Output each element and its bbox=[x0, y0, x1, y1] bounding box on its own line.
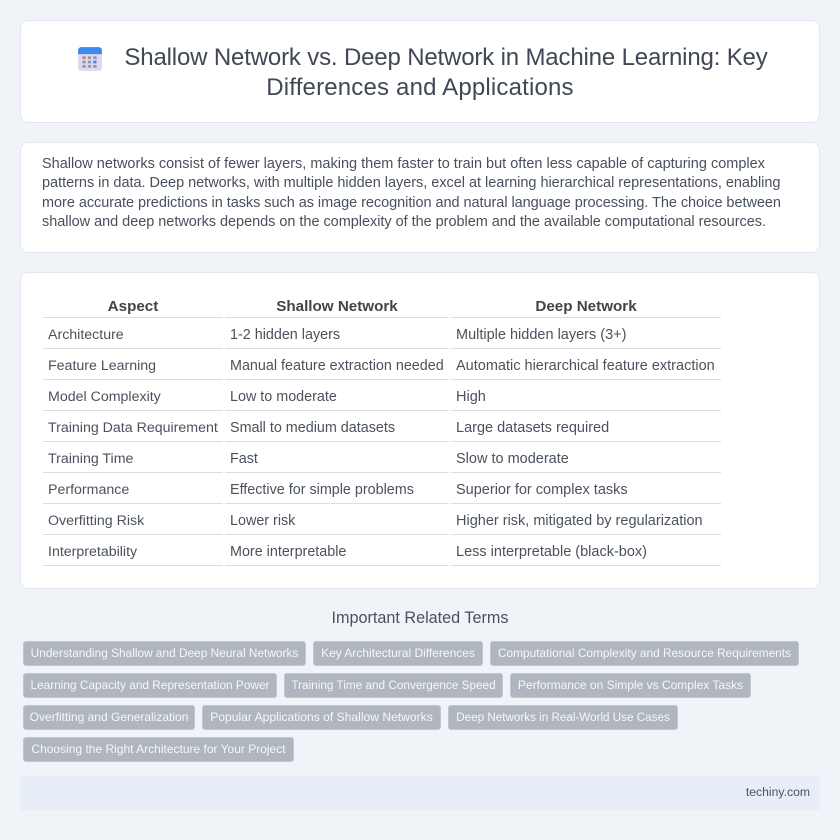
description text: patterns in data. Deep networks, with multiple hidden layers, excel at learning hierarchical representations, enabling bbox=[42, 175, 780, 191]
table header bbox=[43, 298, 721, 318]
comparison table: Interpretability bbox=[48, 544, 137, 560]
description panel bbox=[20, 142, 820, 253]
related terms tags: Key Architectural Differences bbox=[321, 646, 475, 660]
related terms tags: Training Time and Convergence Speed bbox=[291, 679, 496, 692]
comparison table: Effective for simple problems bbox=[230, 482, 414, 498]
comparison table panel bbox=[20, 272, 820, 589]
comparison table: Manual feature extraction needed bbox=[230, 358, 444, 374]
comparison table: More interpretable bbox=[230, 544, 346, 560]
table header: Aspect bbox=[108, 298, 158, 315]
related terms tags: Performance on Simple vs Complex Tasks bbox=[518, 678, 743, 692]
title: Differences and Applications bbox=[266, 74, 574, 101]
comparison table: High bbox=[456, 389, 486, 405]
related terms tags bbox=[23, 641, 799, 762]
description text: shallow and deep networks depends on the complexity of the problem and the available computational resources. bbox=[42, 214, 766, 230]
comparison table: Large datasets required bbox=[456, 420, 609, 436]
comparison table: Feature Learning bbox=[48, 358, 156, 374]
related terms heading: Important Related Terms bbox=[332, 609, 508, 627]
comparison table: Model Complexity bbox=[48, 389, 161, 405]
comparison table: Automatic hierarchical feature extraction bbox=[456, 358, 715, 374]
footer bar bbox=[20, 776, 820, 810]
comparison table: Superior for complex tasks bbox=[456, 482, 628, 498]
table header: Shallow Network bbox=[276, 298, 398, 315]
header panel bbox=[20, 20, 820, 123]
title bbox=[124, 44, 768, 101]
related terms tags: Popular Applications of Shallow Networks bbox=[210, 710, 433, 724]
description text: more accurate predictions in tasks such as image recognition and natural language processing. The choice between bbox=[42, 195, 781, 211]
comparison table: Fast bbox=[230, 451, 258, 467]
comparison table: Performance bbox=[48, 482, 129, 498]
description text bbox=[42, 156, 781, 230]
related terms tags: Deep Networks in Real-World Use Cases bbox=[456, 711, 670, 724]
comparison table: Less interpretable (black-box) bbox=[456, 544, 647, 560]
table header: Deep Network bbox=[535, 298, 637, 315]
related terms tags: Learning Capacity and Representation Power bbox=[30, 678, 270, 692]
comparison table bbox=[43, 298, 721, 566]
description text: Shallow networks consist of fewer layers, making them faster to train but often less capable of capturing complex bbox=[42, 156, 765, 172]
comparison table: Architecture bbox=[48, 327, 124, 343]
related terms tags: Computational Complexity and Resource Requirements bbox=[498, 646, 791, 660]
comparison table: Slow to moderate bbox=[456, 451, 569, 467]
comparison table: Multiple hidden layers (3+) bbox=[456, 327, 626, 343]
comparison table: 1-2 hidden layers bbox=[230, 327, 340, 343]
comparison table: Training Data Requirement bbox=[48, 420, 218, 436]
comparison table: Training Time bbox=[48, 451, 133, 467]
related terms tags: Overfitting and Generalization bbox=[30, 710, 188, 724]
comparison table: Overfitting Risk bbox=[48, 513, 144, 529]
comparison table: Higher risk, mitigated by regularization bbox=[456, 513, 703, 529]
footer source: techiny.com bbox=[746, 785, 810, 799]
comparison table: Lower risk bbox=[230, 513, 295, 529]
icon: calendar bbox=[78, 47, 102, 71]
comparison table: Small to medium datasets bbox=[230, 420, 395, 436]
related terms tags: Understanding Shallow and Deep Neural Networks bbox=[31, 646, 298, 660]
comparison table: Low to moderate bbox=[230, 389, 337, 405]
title: Shallow Network vs. Deep Network in Machine Learning: Key bbox=[124, 44, 768, 71]
related terms tags: Choosing the Right Architecture for Your Project bbox=[31, 742, 286, 756]
